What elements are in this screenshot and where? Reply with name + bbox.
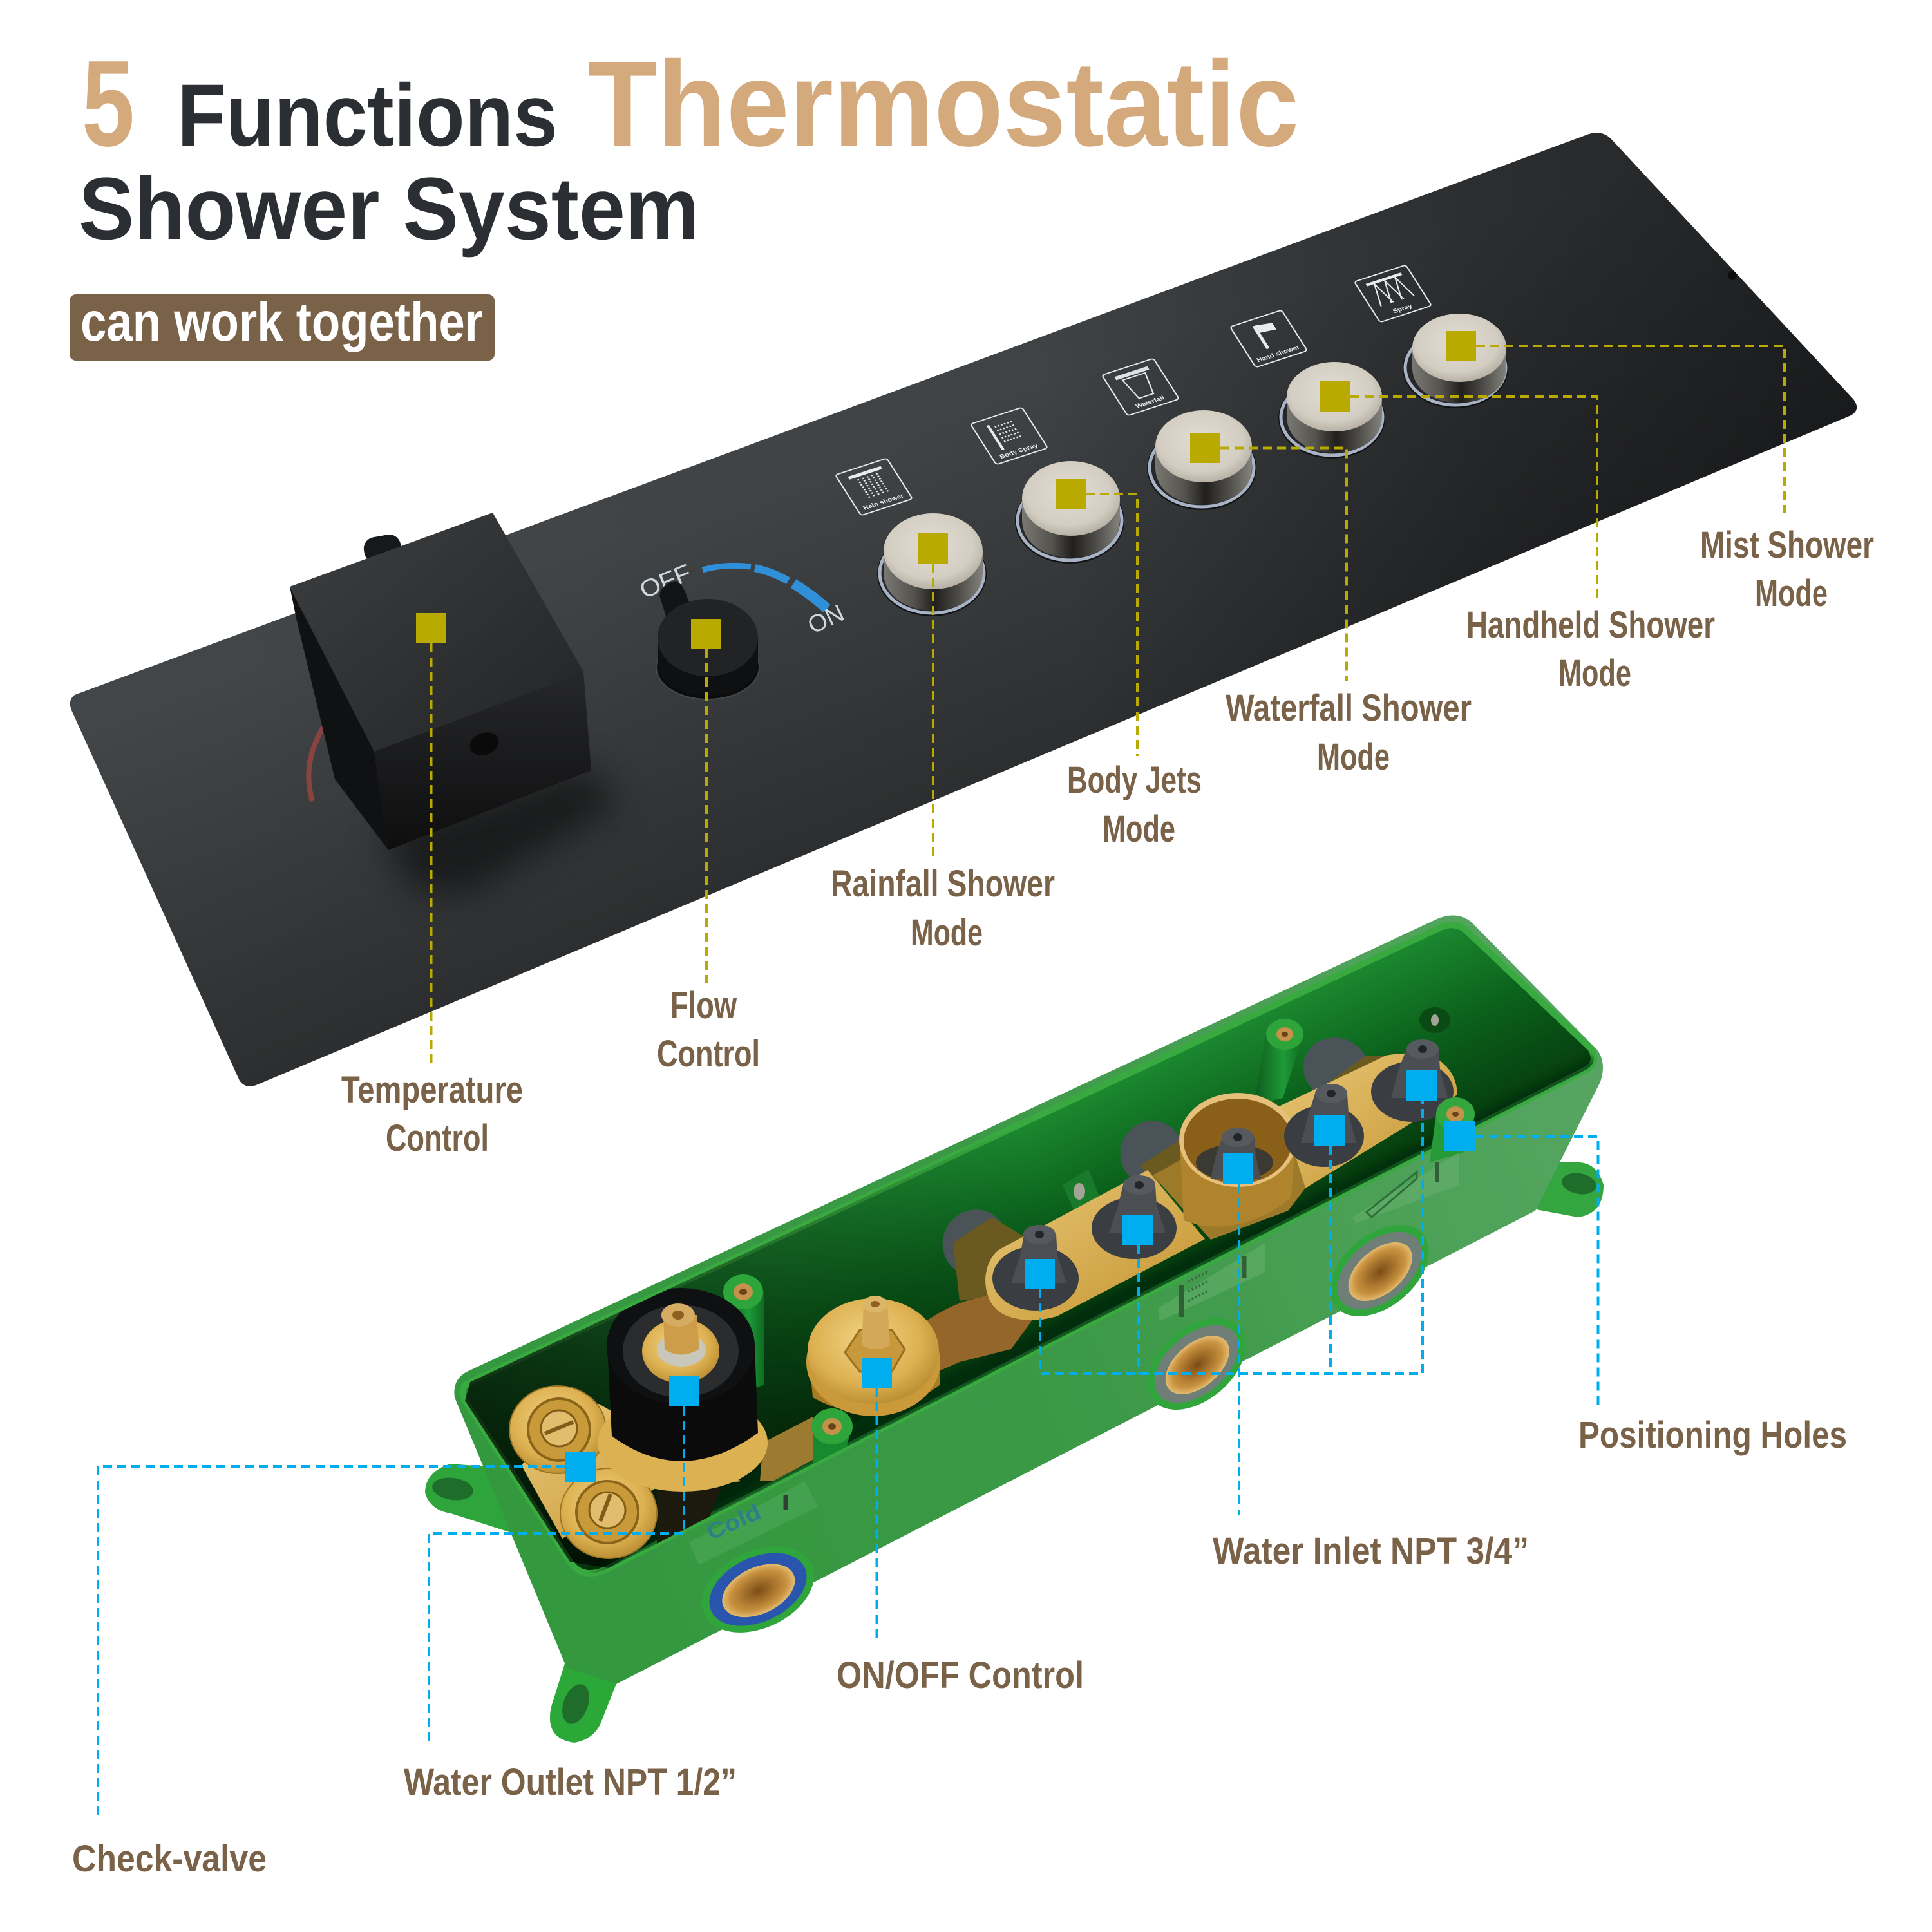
callout: check-valve <box>72 1452 596 1880</box>
brass block between cartridges <box>760 1417 813 1481</box>
callout: check-valve: Check-valve <box>72 1838 267 1880</box>
icon: rain shower <box>835 459 913 515</box>
callout: flow control: Control <box>657 1033 760 1075</box>
callout: mist shower mode: Mist Shower <box>1700 524 1874 566</box>
socket: cold blue ring <box>688 1530 828 1649</box>
standoff posts and screws <box>723 1007 1450 1394</box>
Cold text on box: Cold <box>703 1500 765 1545</box>
callout: body jets mode <box>1056 479 1202 850</box>
box outer body and front wall <box>454 915 1603 1684</box>
OFF label: OFF <box>636 560 695 604</box>
icon: hand shower <box>1230 310 1307 367</box>
callout: flow control <box>657 619 760 1075</box>
title line Shower System: Shower System <box>79 160 699 258</box>
callout: on/off control <box>837 1358 1084 1696</box>
icon: spray: Spray <box>1392 303 1414 315</box>
button: mist <box>1403 314 1508 408</box>
button: handheld <box>1278 362 1385 459</box>
callout: water inlet NPT 3/4 <box>1025 1070 1529 1572</box>
badge: can work together: can work together <box>80 292 483 353</box>
front wall sticker patches <box>689 1153 1459 1565</box>
icon: waterfall: Waterfall <box>1135 395 1166 410</box>
mounting ear: bottom <box>550 1662 617 1743</box>
mounting ear: left <box>425 1464 522 1536</box>
callout: positioning holes: Positioning Holes <box>1578 1414 1847 1456</box>
brass cup <box>1179 1093 1296 1226</box>
callout: mist shower mode: Mode <box>1755 573 1828 614</box>
valve assembly <box>465 1007 1597 1584</box>
callout: temperature control: Temperature <box>341 1069 523 1111</box>
socket: right <box>1313 1207 1446 1334</box>
callout: water outlet NPT 1/2: Water Outlet NPT 1/2” <box>404 1761 737 1803</box>
callout: mist shower mode <box>1446 331 1874 614</box>
callout: water inlet NPT 3/4: Water Inlet NPT 3/4” <box>1213 1530 1529 1572</box>
large thermostatic cartridge <box>598 1288 768 1492</box>
callout: flow control: Flow <box>670 985 737 1027</box>
icon: body spray <box>971 407 1048 465</box>
temperature cube handle <box>290 513 591 850</box>
brass manifold <box>985 1054 1457 1320</box>
title word Functions: Functions <box>177 66 558 165</box>
button: waterfall <box>1147 410 1256 510</box>
callout: waterfall shower mode: Waterfall Shower <box>1226 687 1472 729</box>
ON label: ON <box>804 600 848 639</box>
callout: handheld shower mode <box>1320 381 1715 694</box>
callout: rainfall shower mode: Rainfall Shower <box>831 863 1055 905</box>
icon: body spray: Body Spray <box>998 442 1039 460</box>
box interior <box>462 925 1594 1573</box>
mounting ear: right <box>1536 1162 1604 1217</box>
title word Thermostatic: Thermostatic <box>588 36 1299 171</box>
callout: on/off control: ON/OFF Control <box>837 1654 1084 1696</box>
panel: black shower control plate <box>70 133 1857 1086</box>
callout: waterfall shower mode <box>1190 433 1472 778</box>
callout: positioning holes <box>1444 1121 1847 1456</box>
title <box>79 35 1299 258</box>
callout: water outlet NPT 1/2 <box>404 1376 737 1803</box>
black cartridges <box>992 1039 1454 1311</box>
button: body jets <box>1015 461 1124 564</box>
callout: handheld shower mode: Mode <box>1558 652 1631 694</box>
on/off brass cartridge <box>806 1296 940 1416</box>
callout: rainfall shower mode <box>831 533 1055 954</box>
front standoff <box>1430 1097 1475 1162</box>
bronze connecting pipe <box>927 1296 1032 1370</box>
callout: body jets mode: Mode <box>1103 808 1175 850</box>
callout: rainfall shower mode: Mode <box>911 912 983 954</box>
callout: temperature control: Control <box>386 1117 489 1159</box>
icon: waterfall <box>1102 358 1179 416</box>
callout: temperature control <box>341 613 523 1159</box>
flow scale arc <box>636 560 848 639</box>
socket: middle <box>1130 1300 1263 1428</box>
icon: spray <box>1354 265 1432 322</box>
brass check-valve plate <box>509 1386 741 1558</box>
button: rainfall <box>877 513 987 616</box>
red temperature arc <box>308 727 323 801</box>
title number 5: 5 <box>82 35 135 172</box>
callout: waterfall shower mode: Mode <box>1317 736 1390 778</box>
flow control dial <box>656 581 759 699</box>
small standoff near on/off <box>811 1408 853 1468</box>
callout: body jets mode: Body Jets <box>1067 759 1202 801</box>
icon: rain shower: Rain shower <box>862 493 905 511</box>
callout: handheld shower mode: Handheld Shower <box>1466 604 1715 646</box>
icon: hand shower: Hand shower <box>1256 345 1302 364</box>
grommets and bronze connectors behind manifold <box>932 1027 1391 1301</box>
panel: green rough-in valve box <box>425 915 1604 1743</box>
